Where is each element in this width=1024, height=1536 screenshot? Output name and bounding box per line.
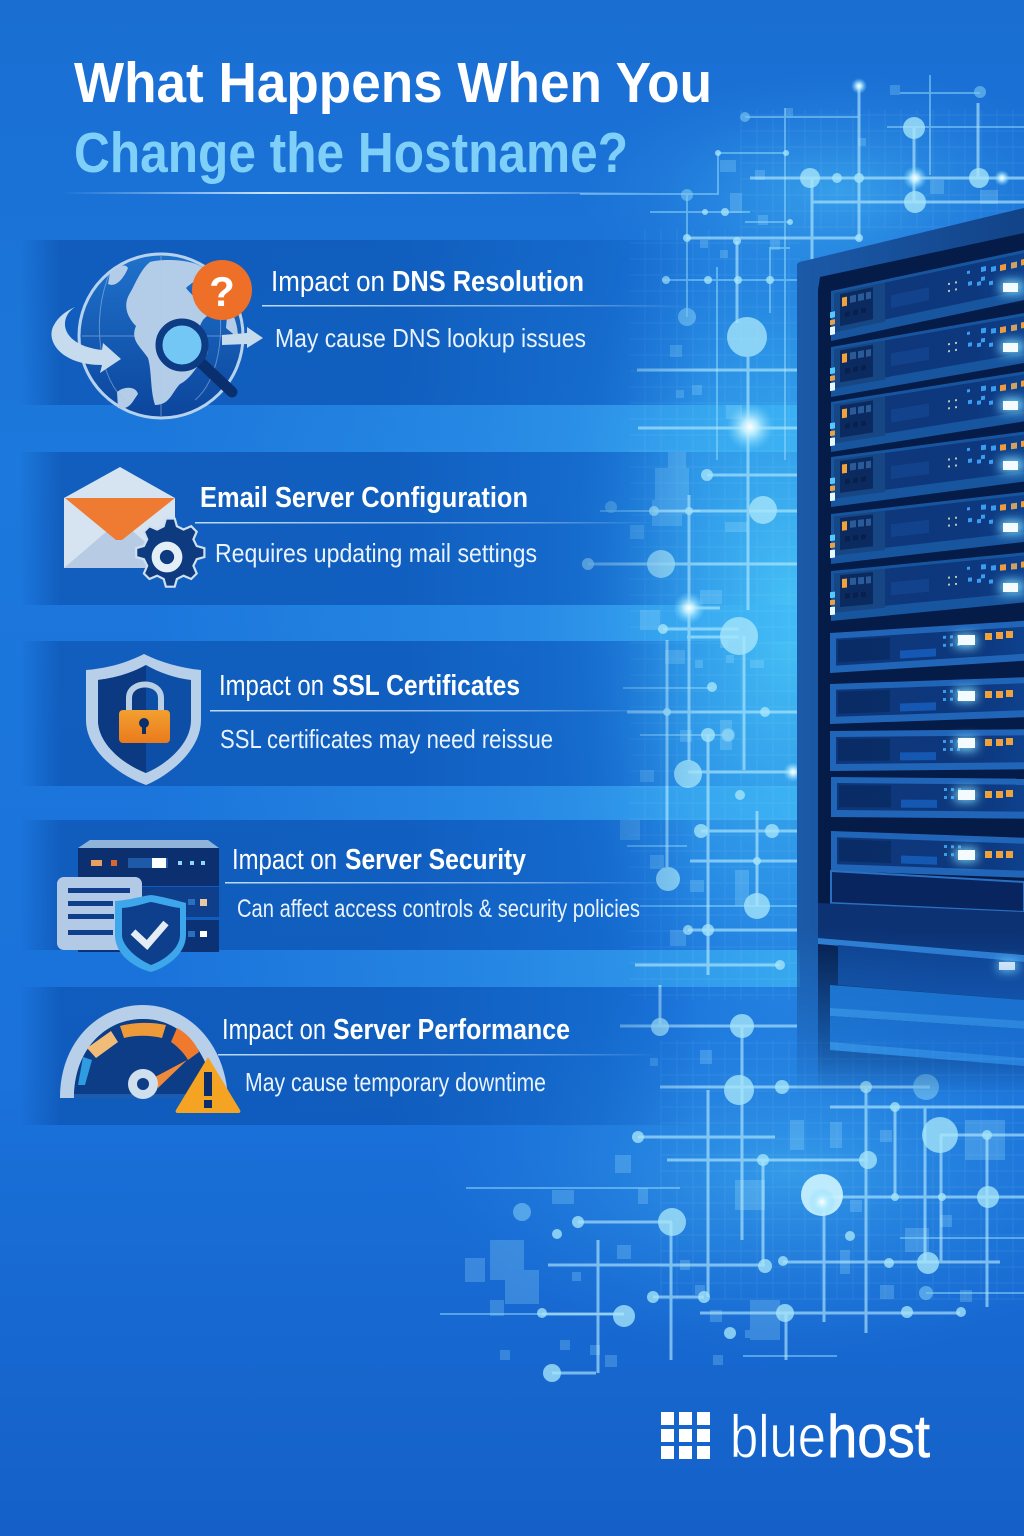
panel: email server configuration bbox=[20, 452, 700, 605]
title: What Happens When You bbox=[74, 51, 712, 115]
bright hub node bbox=[801, 1174, 843, 1216]
panel: DNS resolution: Impact on bbox=[271, 266, 385, 298]
icon: shield with padlock bbox=[86, 654, 201, 785]
logo wordmark: host bbox=[827, 1403, 930, 1470]
panel: server performance: Impact on bbox=[222, 1014, 326, 1046]
unit lights bbox=[955, 280, 1024, 972]
logo grid bbox=[661, 1412, 710, 1459]
panel: DNS resolution: May cause DNS lookup issues bbox=[275, 323, 586, 353]
logo wordmark bbox=[730, 1403, 930, 1470]
pixel squares bbox=[465, 85, 1005, 1367]
straight units bbox=[818, 618, 1024, 1066]
panel: server security bbox=[20, 820, 700, 972]
title bbox=[74, 51, 712, 185]
circuit board network bbox=[440, 75, 1024, 1382]
panel: server security: Server Security bbox=[345, 844, 526, 876]
dim top traces bbox=[440, 75, 1024, 1356]
panel: DNS resolution: DNS Resolution bbox=[392, 266, 584, 298]
panel: email server configuration: Requires updating mail settings bbox=[215, 538, 537, 568]
icon: globe with magnifier bbox=[51, 254, 263, 418]
panel: SSL certificates bbox=[20, 641, 700, 786]
icon: question badge bbox=[192, 260, 252, 320]
faint nodes bbox=[513, 86, 986, 1300]
panel: server security: Can affect access controls & security policies bbox=[237, 895, 640, 923]
panel: server performance bbox=[20, 987, 700, 1125]
panel: SSL certificates: SSL Certificates bbox=[332, 670, 520, 702]
panel: server performance: Server Performance bbox=[333, 1014, 570, 1046]
panel: DNS resolution bbox=[20, 240, 700, 418]
server rack bbox=[797, 208, 1024, 1100]
panel: SSL certificates: SSL certificates may need reissue bbox=[220, 724, 553, 754]
rack interior bbox=[818, 233, 1024, 1100]
background glow bbox=[150, 70, 1024, 1360]
panel: SSL certificates: Impact on bbox=[219, 670, 324, 702]
circuit nodes bbox=[537, 117, 999, 1382]
top sloped units bbox=[830, 240, 1024, 621]
bright sparks bbox=[673, 78, 1010, 782]
icon: envelope with gear bbox=[64, 467, 204, 587]
panel: server security: Impact on bbox=[232, 844, 337, 876]
panel: server performance: May cause temporary downtime bbox=[245, 1067, 546, 1097]
bluehost logo bbox=[661, 1403, 930, 1470]
icon: gauge with warning bbox=[60, 1005, 240, 1113]
icon: server, document and check shield bbox=[57, 840, 219, 972]
icon: question badge: ? bbox=[209, 268, 235, 315]
rack frame bbox=[797, 208, 1024, 1100]
wide glowing traces bbox=[542, 86, 1024, 1373]
title: Change the Hostname? bbox=[74, 121, 628, 185]
panel: email server configuration: Email Server Configuration bbox=[200, 482, 528, 514]
logo wordmark: blue bbox=[730, 1403, 826, 1470]
grid texture bbox=[630, 110, 1024, 1300]
